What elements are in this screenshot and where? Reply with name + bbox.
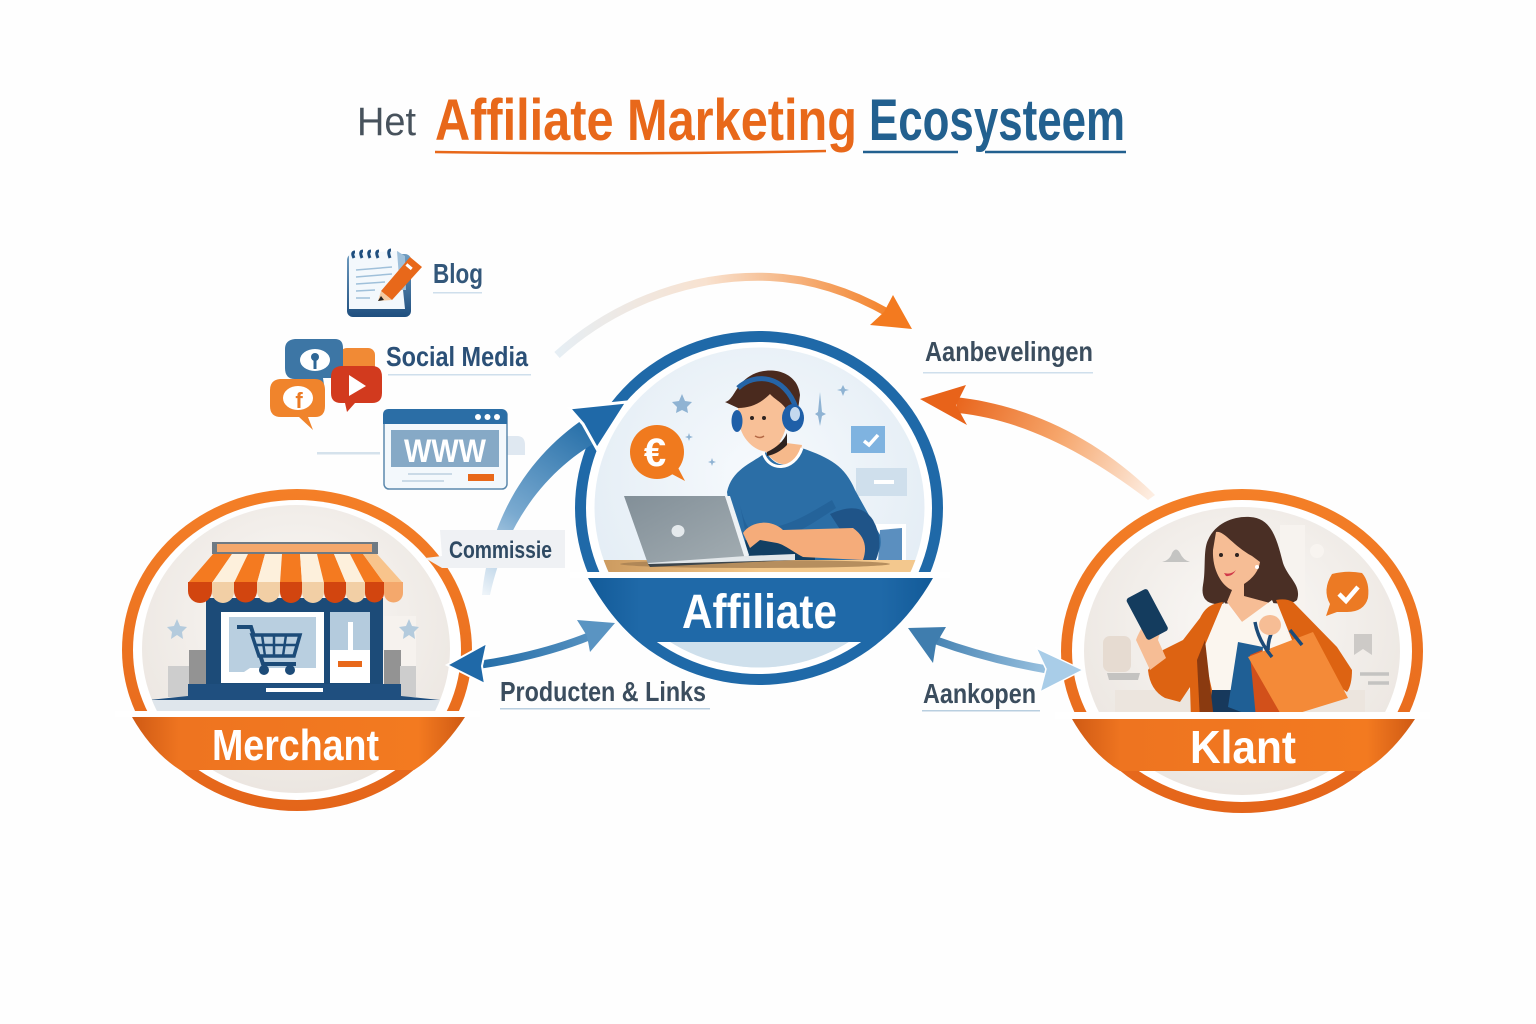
icon: social media bubbles (270, 339, 382, 430)
icon: blue shopping bag (1228, 642, 1263, 718)
figure: head (738, 394, 786, 452)
figure: hair (1202, 517, 1298, 604)
icon: chair (876, 524, 906, 562)
ring (575, 331, 943, 685)
shop building (152, 598, 440, 711)
icon: euro bubble (630, 425, 685, 481)
title word: Het: Het (357, 100, 416, 144)
figure: skirt (1211, 690, 1241, 712)
arrow: top recommendation arc (557, 277, 912, 355)
ring (1061, 489, 1423, 813)
figure: cardigan (1148, 602, 1223, 720)
label: Commissie: Commissie (449, 537, 552, 564)
label band (588, 578, 933, 642)
bubble: microphone (285, 339, 343, 391)
figure: arm and hand (743, 523, 865, 560)
label: Social Media: Social Media (386, 341, 528, 372)
title (357, 88, 1126, 153)
scene: shop (152, 542, 440, 711)
label band (132, 717, 465, 770)
icon: shopping cart (237, 627, 300, 675)
bubble: facebook: f (295, 388, 303, 413)
figure: neck and collar (766, 442, 802, 464)
label: Aanbevelingen: Aanbevelingen (925, 336, 1093, 367)
label band: Klant (1190, 721, 1296, 773)
arrow: Producten double arrow (447, 620, 615, 684)
panel: Klant (1055, 489, 1430, 813)
icon: bookmark (1354, 634, 1372, 655)
bag handles (1255, 622, 1302, 657)
label: Blog: Blog (433, 258, 483, 289)
scene: shopper (1103, 517, 1389, 720)
icon: form card (856, 468, 907, 496)
scene background (142, 505, 450, 793)
table (604, 560, 916, 572)
panel: Merchant (115, 489, 480, 811)
scene background (594, 348, 924, 668)
label: Commissie (425, 530, 565, 568)
figure: face (1213, 532, 1270, 622)
icon: star right (399, 619, 419, 639)
figure: forearm and hand with phone (1126, 588, 1169, 670)
hand on bag (1259, 615, 1281, 635)
icon: star (672, 394, 692, 413)
icon: red shopping bag (1250, 650, 1280, 712)
title word: Ecosysteem: Ecosysteem (869, 88, 1125, 153)
scene: person at laptop (590, 370, 930, 670)
figure: white top (1223, 600, 1274, 622)
figure: torso (727, 448, 881, 560)
icon: orange shopping bag (1248, 632, 1348, 718)
icon: plant (1103, 636, 1140, 680)
figure: headphones (732, 379, 804, 432)
icon: check card (851, 426, 885, 453)
awning (188, 554, 403, 603)
scene background (1084, 507, 1400, 795)
label: Aankopen: Aankopen (923, 678, 1036, 709)
label: Producten & Links: Producten & Links (500, 676, 706, 707)
icon: pencil (378, 257, 422, 301)
figure: hair (725, 370, 800, 408)
website text: WWW (404, 433, 487, 469)
icon: cloud (1162, 550, 1190, 562)
arrow: orange return arc from Klant (920, 385, 1155, 500)
icon: sparkles (685, 385, 849, 466)
lower tint (670, 642, 848, 668)
icon: euro bubble: € (644, 431, 666, 475)
arrow: Commissie arc to Affiliate (482, 402, 627, 595)
panel: Affiliate (570, 331, 950, 685)
label band: Merchant (212, 721, 379, 770)
icon: star left (167, 619, 187, 639)
icon: blog notepad (347, 250, 422, 317)
label band: Affiliate (682, 586, 837, 639)
title words: Affiliate Marketing: Affiliate Marketing (435, 88, 857, 153)
arrow: Aankopen double arrow (908, 627, 1083, 692)
icon: laptop (624, 496, 795, 567)
label band (1072, 719, 1415, 773)
ring (122, 489, 472, 811)
bubble: video play (331, 366, 382, 412)
shop sign (212, 542, 378, 554)
decorative text lines (1360, 674, 1389, 683)
icon: website window (317, 409, 525, 489)
icon: check bubble (1326, 572, 1368, 616)
